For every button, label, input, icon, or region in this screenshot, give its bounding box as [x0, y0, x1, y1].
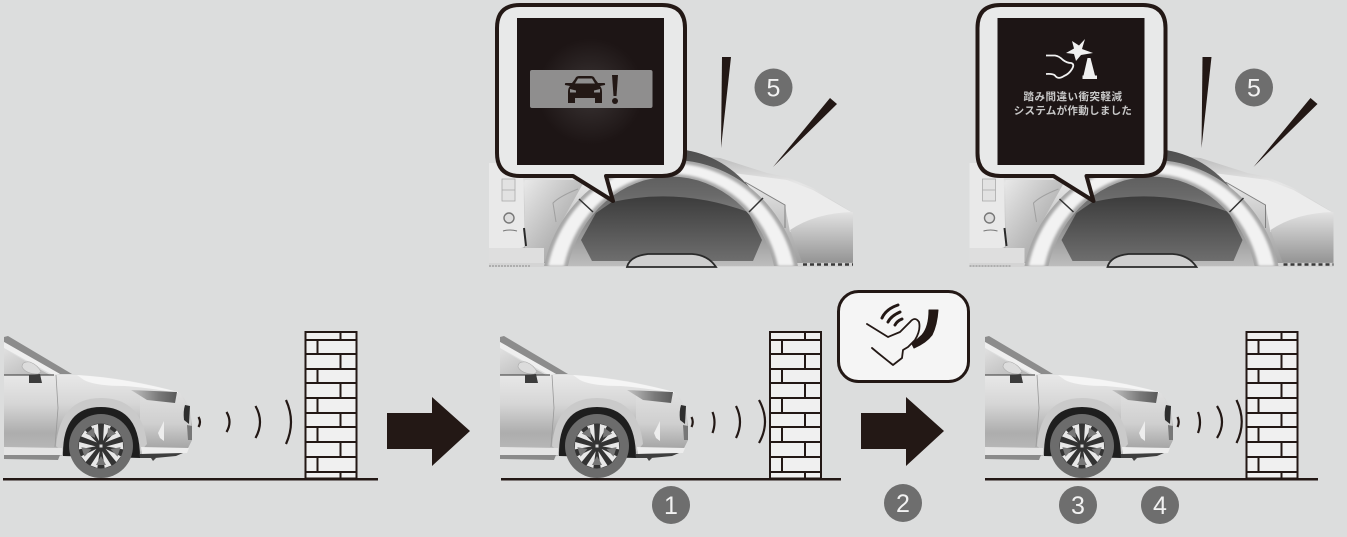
dashboard illustration B: [970, 5, 1334, 267]
dashboard illustration A: [489, 5, 853, 267]
ground line 2: [501, 478, 841, 480]
ground line 1: [3, 478, 378, 480]
dashboard B: activated message: [970, 5, 1334, 267]
sensor waves 1: [198, 400, 291, 444]
wall 3: [1246, 332, 1298, 478]
number 3: [1059, 486, 1097, 524]
screen message: [1014, 90, 1132, 117]
screen message: システムが作動しました: [1014, 104, 1132, 117]
sensor waves 3: [1178, 400, 1242, 443]
ground line 3: [985, 478, 1318, 480]
icon: car with exclamation: [565, 75, 618, 104]
car 1: [4, 336, 192, 478]
number 4: [1141, 486, 1179, 524]
scene 1: car approaching wall: [3, 332, 378, 480]
icon: pedal impact and cone: [1046, 39, 1097, 79]
display screen A: [517, 18, 664, 165]
icon: foot pressing pedal: [867, 305, 938, 365]
arrow 1: [387, 397, 470, 466]
sensor waves 2: [692, 400, 765, 443]
number 3: 3: [1071, 492, 1085, 520]
pedal icon panel: [838, 292, 968, 382]
number 4: 4: [1153, 492, 1167, 520]
number 1: [652, 486, 690, 524]
car 2: [500, 336, 688, 478]
number 1: 1: [664, 492, 678, 520]
number 2: 2: [896, 490, 910, 518]
car 3: [985, 336, 1173, 478]
scene 3: car after mitigation: [985, 332, 1318, 524]
dashboard A: warning display: [489, 5, 853, 267]
wall 1: [305, 332, 357, 478]
arrow 2: [861, 397, 944, 466]
screen message: 踏み間違い衝突軽減: [1024, 90, 1122, 103]
display screen B: [998, 18, 1144, 165]
wall 2: [770, 332, 822, 478]
warning bar: [530, 70, 652, 108]
scene 2: car near wall: [500, 332, 841, 524]
number 2: [884, 484, 922, 522]
